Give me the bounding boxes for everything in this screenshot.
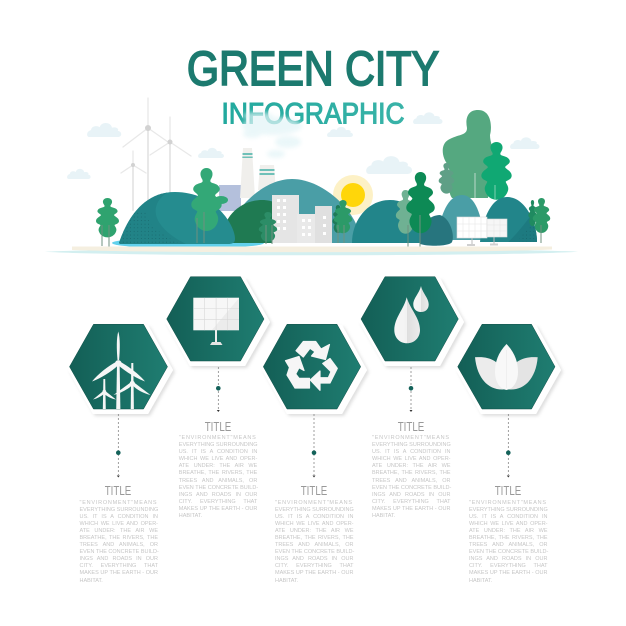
- connector 2: [216, 367, 221, 412]
- tree: bright green: [481, 142, 512, 200]
- text block: column 4: [372, 435, 452, 519]
- text block: column 4: US. IT IS A CONDITION IN: [372, 449, 450, 455]
- text block: column 4: MAKES UP THE EARTH - OUR: [372, 506, 450, 512]
- text block: column 5: MAKES UP THE EARTH - OUR: [469, 570, 548, 576]
- light teal hill: [437, 195, 484, 240]
- text block: column 4: EVERYTHING SURROUNDING: [372, 442, 451, 448]
- heading: column 1 title: TITLE: [105, 484, 132, 498]
- text block: column 5: ATE UNDER: THE AIR WE: [469, 528, 548, 534]
- text block: column 1: EVEN THE CONCRETE BUILD-: [80, 549, 159, 555]
- text block: column 1: CITY. EVERYTHING THAT: [80, 563, 158, 569]
- big background tree: [439, 110, 493, 198]
- text block: column 2: HABITAT.: [179, 513, 202, 519]
- icon: recycle arrows: [286, 342, 337, 390]
- text block: column 3: BREATHE, THE RIVERS, THE: [275, 535, 354, 541]
- purple building: [219, 185, 241, 211]
- text block: column 5: EVERYTHING SURROUNDING: [469, 507, 548, 513]
- heading: column 4 title: TITLE: [398, 420, 424, 434]
- text block: column 1: MAKES UP THE EARTH - OUR: [80, 570, 158, 576]
- city buildings: [272, 195, 332, 243]
- text block: column 2: EVEN THE CONCRETE BUILD-: [179, 485, 258, 491]
- text block: column 4: BREATHE, THE RIVERS, THE: [372, 470, 450, 476]
- text block: column 4: HABITAT.: [372, 513, 395, 519]
- text block: column 3: "ENVIRONMENT"MEANS: [275, 500, 353, 506]
- heading: column 5 title: TITLE: [495, 484, 522, 498]
- text block: column 2: "ENVIRONMENT"MEANS: [179, 435, 257, 441]
- icon: solar panel: [193, 298, 239, 345]
- text block: column 5: CITY. EVERYTHING THAT: [469, 563, 548, 569]
- connector 5: [506, 414, 511, 478]
- text block: column 1: WHICH WE LIVE AND OPER-: [80, 521, 158, 527]
- text block: column 1: TREES AND ANIMALS, OR: [80, 542, 158, 548]
- text block: column 3: EVEN THE CONCRETE BUILD-: [275, 549, 354, 555]
- text block: column 3: WHICH WE LIVE AND OPER-: [275, 521, 354, 527]
- text block: column 1: BREATHE, THE RIVERS, THE: [80, 535, 158, 541]
- hexagon 5: lotus leaves: [456, 324, 561, 414]
- text block: column 3: CITY. EVERYTHING THAT: [275, 563, 354, 569]
- subtitle: INFOGRAPHIC: INFOGRAPHIC: [222, 97, 404, 130]
- text block: column 1: EVERYTHING SURROUNDING: [80, 507, 158, 513]
- heading: column 2 title: TITLE: [205, 420, 232, 434]
- chimneys: [240, 148, 276, 198]
- heading: column 3 title: TITLE: [301, 484, 327, 498]
- wind turbines: [121, 98, 191, 210]
- text block: column 5: [469, 500, 548, 584]
- text block: column 2: WHICH WE LIVE AND OPER-: [179, 456, 257, 462]
- text block: column 4: TREES AND ANIMALS, OR: [372, 478, 450, 484]
- teal hill with speckles: [119, 192, 235, 244]
- text block: column 3: EVERYTHING SURROUNDING: [275, 507, 354, 513]
- hexagon 2: solar panel: [165, 277, 270, 366]
- solar panels: [457, 217, 507, 246]
- text block: column 2: BREATHE, THE RIVERS, THE: [179, 470, 257, 476]
- text block: column 3: HABITAT.: [275, 578, 298, 584]
- text block: column 1: ATE UNDER: THE AIR WE: [80, 528, 158, 534]
- icon: lotus: [475, 344, 538, 390]
- text block: column 1: "ENVIRONMENT"MEANS: [80, 500, 157, 506]
- text block: column 1: US. IT IS A CONDITION IN: [80, 514, 158, 520]
- dark teal blob: [419, 215, 453, 246]
- connector 1: [116, 414, 121, 478]
- connector 3: [312, 414, 316, 478]
- dome: [222, 179, 360, 243]
- text block: column 3: INGS AND ROADS IN OUR: [275, 556, 354, 562]
- text block: column 3: ATE UNDER: THE AIR WE: [275, 528, 354, 534]
- text block: column 1: HABITAT.: [80, 578, 103, 584]
- text block: column 4: ATE UNDER: THE AIR WE: [372, 463, 450, 469]
- teal hill far right: [480, 197, 537, 242]
- text block: column 4: INGS AND ROADS IN OUR: [372, 492, 450, 498]
- text block: column 1: [80, 500, 159, 584]
- illustration: green city landscape: [45, 98, 578, 255]
- text block: column 2: EVERYTHING SURROUNDING: [179, 442, 258, 448]
- text block: column 3: MAKES UP THE EARTH - OUR: [275, 570, 354, 576]
- text block: column 4: WHICH WE LIVE AND OPER-: [372, 456, 450, 462]
- text block: column 2: MAKES UP THE EARTH - OUR: [179, 506, 257, 512]
- text block: column 5: "ENVIRONMENT"MEANS: [469, 500, 547, 506]
- text block: column 2: INGS AND ROADS IN OUR: [179, 492, 257, 498]
- connector 4: [409, 367, 413, 412]
- text block: column 2: [178, 435, 258, 519]
- foreground trees: [96, 168, 550, 247]
- text block: column 3: US. IT IS A CONDITION IN: [275, 514, 354, 520]
- text block: column 5: EVEN THE CONCRETE BUILD-: [469, 549, 548, 555]
- water: [112, 238, 264, 248]
- icon: water drops: [394, 286, 429, 343]
- text block: column 2: TREES AND ANIMALS, OR: [179, 478, 257, 484]
- text block: column 5: WHICH WE LIVE AND OPER-: [469, 521, 548, 527]
- hexagon 4: water drops: [359, 277, 464, 366]
- text block: column 2: CITY. EVERYTHING THAT: [179, 499, 257, 505]
- text block: column 3: [275, 500, 354, 584]
- text block: column 2: US. IT IS A CONDITION IN: [179, 449, 257, 455]
- ground: [45, 249, 578, 255]
- text block: column 4: "ENVIRONMENT"MEANS: [372, 435, 450, 441]
- text block: column 5: BREATHE, THE RIVERS, THE: [469, 535, 548, 541]
- text block: column 2: ATE UNDER: THE AIR WE: [179, 463, 257, 469]
- text block: column 5: HABITAT.: [469, 578, 492, 584]
- text block: column 4: CITY. EVERYTHING THAT: [372, 499, 450, 505]
- clouds: [67, 112, 539, 179]
- sun: [333, 175, 373, 215]
- teal hill right of city: [352, 200, 432, 243]
- text block: column 4: EVEN THE CONCRETE BUILD-: [372, 485, 451, 491]
- text block: column 1: INGS AND ROADS IN OUR: [80, 556, 158, 562]
- hexagon 1: wind energy: [68, 324, 173, 414]
- text block: column 5: INGS AND ROADS IN OUR: [469, 556, 548, 562]
- text block: column 5: US. IT IS A CONDITION IN: [469, 514, 548, 520]
- icon: wind turbines: [92, 332, 150, 410]
- text block: column 3: TREES AND ANIMALS, OR: [275, 542, 354, 548]
- dark green hill: [223, 200, 298, 243]
- hexagon 3: recycling: [262, 324, 367, 414]
- text block: column 5: TREES AND ANIMALS, OR: [469, 542, 548, 548]
- smoke: [242, 112, 302, 158]
- title: GREEN CITY: GREEN CITY: [187, 43, 439, 96]
